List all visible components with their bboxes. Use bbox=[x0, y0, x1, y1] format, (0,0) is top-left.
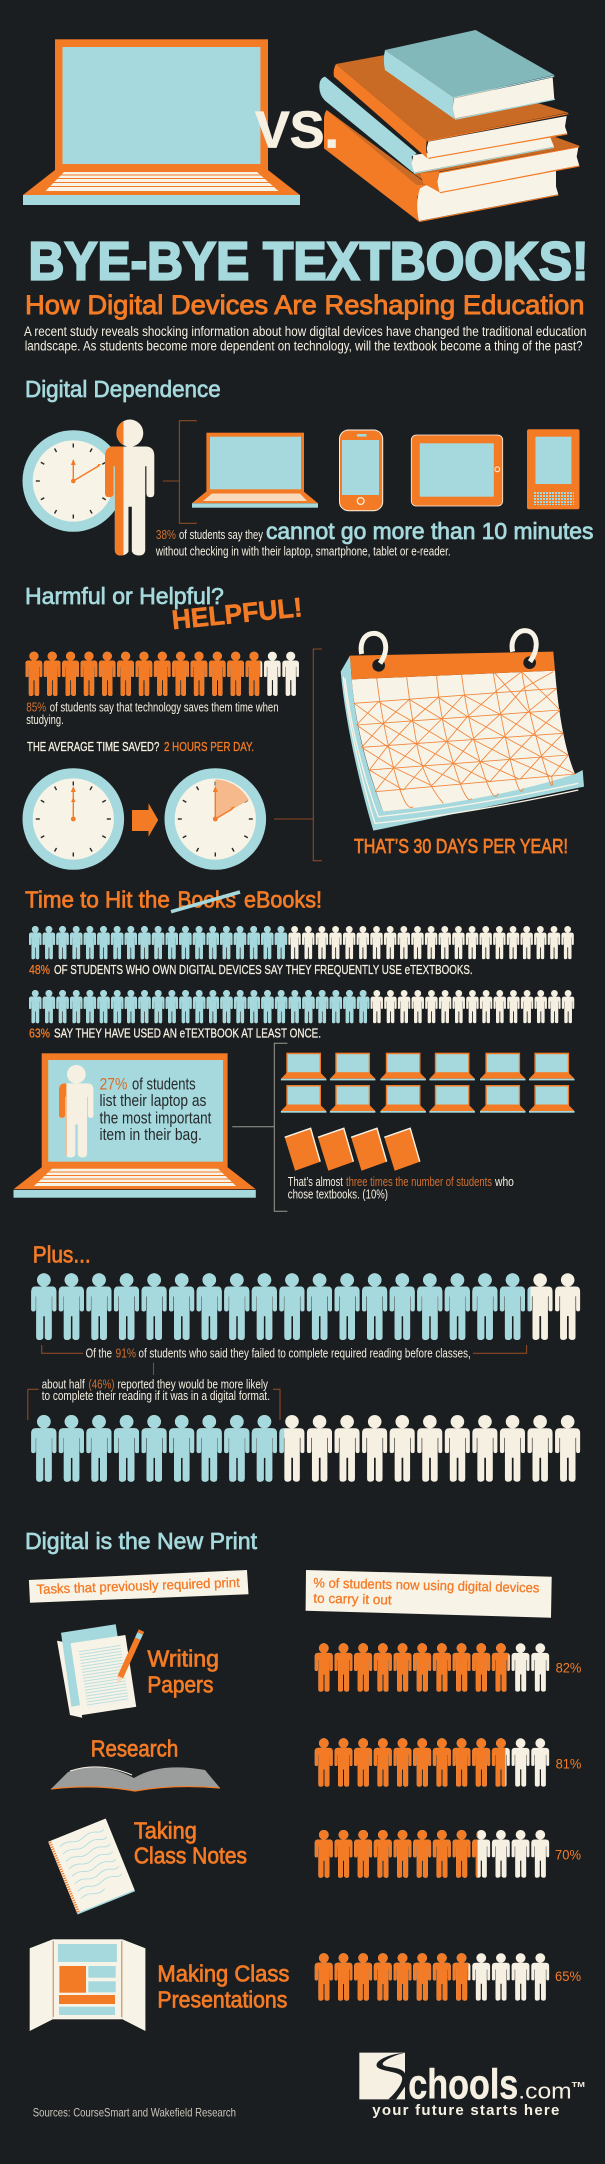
icon: clock after bbox=[164, 768, 266, 870]
logo: schools.com: chools bbox=[408, 2060, 518, 2107]
logo: schools.com bbox=[359, 2053, 585, 2119]
intro text bbox=[24, 324, 586, 354]
stat text: 46 percent: to complete their reading if it was in a digital format. bbox=[42, 1389, 270, 1403]
value: 65 percent: 65% bbox=[555, 1969, 581, 1984]
icon: half orange person bbox=[105, 420, 154, 556]
heading: Harmful or Helpful? bbox=[25, 583, 224, 609]
icon: presentation board bbox=[30, 1939, 145, 2031]
heading: Plus... bbox=[33, 1241, 91, 1267]
note: percent header: to carry it out bbox=[313, 1591, 392, 1607]
label: making class presentations bbox=[157, 1961, 289, 2012]
stat text: 48 percent: OF STUDENTS WHO OWN DIGITAL DEVICES SAY THEY FREQUENTLY USE eTEXTBOOKS. bbox=[54, 963, 473, 977]
stat text: 91 percent bbox=[86, 1346, 471, 1360]
note: percent header bbox=[306, 1570, 552, 1618]
label: making class presentations: Presentations bbox=[157, 1986, 287, 2012]
label: taking class notes bbox=[134, 1817, 247, 1868]
stat text: 85 percent: studying. bbox=[26, 713, 64, 727]
heading: Time to Hit the bbox=[25, 887, 170, 913]
icon: open book bbox=[51, 1767, 220, 1791]
icon: large laptop bbox=[23, 39, 300, 205]
stamp: helpful: HELPFUL! bbox=[170, 592, 304, 635]
icon: laptop with person and stat: list their laptop as bbox=[100, 1092, 206, 1110]
stat text: 91 percent: Of the bbox=[86, 1346, 112, 1360]
stat text bbox=[155, 518, 593, 559]
icon group: four books bbox=[285, 1128, 420, 1171]
stat text: 91 percent: of students who said they failed to complete required reading before classes, bbox=[138, 1346, 471, 1360]
panel: header illustration bbox=[23, 30, 580, 222]
logo: schools.com: .com bbox=[518, 2078, 572, 2103]
icon: laptop bbox=[192, 433, 318, 508]
logo: schools.com: your future starts here bbox=[372, 2102, 559, 2119]
bracket bbox=[28, 1389, 280, 1420]
stat text: cannot go more than 10 minutes bbox=[266, 518, 593, 544]
label: research: Research bbox=[91, 1736, 178, 1762]
comparison text: three times the number of students bbox=[346, 1175, 492, 1189]
stat text: without checking in with their laptop, smartphone, tablet or e-reader. bbox=[155, 545, 451, 559]
label: writing papers: Papers bbox=[147, 1671, 213, 1697]
note: tasks header: Tasks that previously required print bbox=[36, 1575, 240, 1597]
stat text: average time saved: 2 HOURS PER DAY. bbox=[164, 739, 254, 754]
people row: 81 percent bbox=[315, 1738, 549, 1787]
label: writing papers: Writing bbox=[147, 1646, 219, 1672]
people row: 48 percent bbox=[29, 926, 574, 959]
label: taking class notes: Class Notes bbox=[134, 1842, 247, 1868]
icon: laptop with person and stat: the most important bbox=[100, 1109, 212, 1127]
stat text: 85 percent: 85% bbox=[26, 701, 46, 715]
value: 82 percent: 82% bbox=[556, 1660, 581, 1675]
bracket bbox=[163, 421, 197, 523]
label: vs.: VS. bbox=[255, 102, 339, 160]
comparison text: chose textbooks. (10%) bbox=[288, 1187, 388, 1201]
people row: 65 percent bbox=[315, 1953, 549, 2001]
icon: tablet bbox=[411, 435, 503, 506]
stat text: of students say they bbox=[179, 528, 264, 542]
stat text: 46 percent bbox=[42, 1377, 270, 1403]
value: 81 percent: 81% bbox=[556, 1756, 581, 1771]
stat text: 38% bbox=[156, 528, 176, 542]
icon: smartphone bbox=[340, 430, 383, 511]
icon: papers and pencil bbox=[57, 1624, 144, 1718]
icon: clock bbox=[23, 430, 124, 532]
stat text: average time saved: THE AVERAGE TIME SAVED? bbox=[27, 739, 159, 754]
stat text: 46 percent: (46%) bbox=[88, 1377, 114, 1391]
icon: calendar bbox=[341, 631, 584, 831]
people row: 85 percent bbox=[26, 652, 299, 696]
panel: time to hit the ebooks bbox=[14, 887, 574, 1211]
icon group: twelve laptops bbox=[281, 1053, 574, 1113]
logo: schools.com: TM bbox=[572, 2080, 585, 2089]
panel: plus bbox=[28, 1241, 580, 1482]
heading: Digital is the New Print bbox=[25, 1528, 258, 1554]
heading: Books bbox=[178, 887, 236, 913]
stat text: 46 percent: about half bbox=[42, 1377, 85, 1391]
label: making class presentations: Making Class bbox=[157, 1961, 289, 1987]
people row: 63 percent bbox=[29, 990, 574, 1023]
stat text: 85 percent: of students say that technology saves them time when bbox=[50, 701, 279, 715]
label: taking class notes: Taking bbox=[134, 1817, 197, 1843]
panel: digital is the new print bbox=[25, 1528, 581, 2031]
icon: laptop with person and stat: 27% bbox=[100, 1075, 128, 1093]
icon: spiral notebook bbox=[48, 1818, 135, 1914]
icon: arrow bbox=[132, 803, 158, 837]
bracket bbox=[42, 1345, 527, 1375]
people row: 46 percent bbox=[31, 1415, 580, 1482]
subtitle: How Digital Devices Are Reshaping Education bbox=[25, 290, 584, 320]
note: tasks header bbox=[29, 1570, 249, 1603]
comparison text: who bbox=[494, 1175, 514, 1189]
icon: laptop with person and stat bbox=[14, 1053, 256, 1198]
bracket bbox=[274, 649, 322, 861]
icon: stack of books bbox=[319, 30, 580, 222]
comparison text: That’s almost bbox=[288, 1175, 343, 1189]
stat text: 63 percent: 63% bbox=[29, 1027, 50, 1041]
panel: digital dependence bbox=[23, 376, 593, 559]
comparison text bbox=[288, 1175, 514, 1201]
note: percent header: % of students now using digital devices bbox=[313, 1575, 540, 1595]
heading bbox=[25, 887, 322, 913]
people row: 91 percent bbox=[31, 1273, 580, 1340]
panel: harmful or helpful bbox=[23, 583, 584, 870]
stat text: 63 percent: SAY THEY HAVE USED AN eTEXTBOOK AT LEAST ONCE. bbox=[54, 1027, 321, 1041]
heading: Digital Dependence bbox=[25, 376, 221, 402]
icon: clock before bbox=[23, 768, 124, 870]
stat text: 48 percent: 48% bbox=[29, 963, 50, 977]
sources: Sources: CourseSmart and Wakefield Research bbox=[33, 2106, 236, 2120]
label: writing papers bbox=[147, 1646, 219, 1697]
icon: e-reader bbox=[527, 429, 580, 509]
value: 70 percent: 70% bbox=[555, 1847, 581, 1862]
stat text: 46 percent: reported they would be more likely bbox=[118, 1377, 269, 1391]
stat text: 85 percent bbox=[26, 701, 279, 727]
stat text: 91 percent: 91% bbox=[116, 1346, 136, 1360]
bracket bbox=[232, 1043, 287, 1211]
people row: 82 percent bbox=[315, 1643, 549, 1692]
icon: laptop with person and stat: of students bbox=[132, 1075, 196, 1093]
people row: 70 percent bbox=[315, 1830, 549, 1878]
heading: eBooks! bbox=[244, 887, 322, 913]
icon: laptop with person and stat: item in their bag. bbox=[100, 1126, 202, 1144]
